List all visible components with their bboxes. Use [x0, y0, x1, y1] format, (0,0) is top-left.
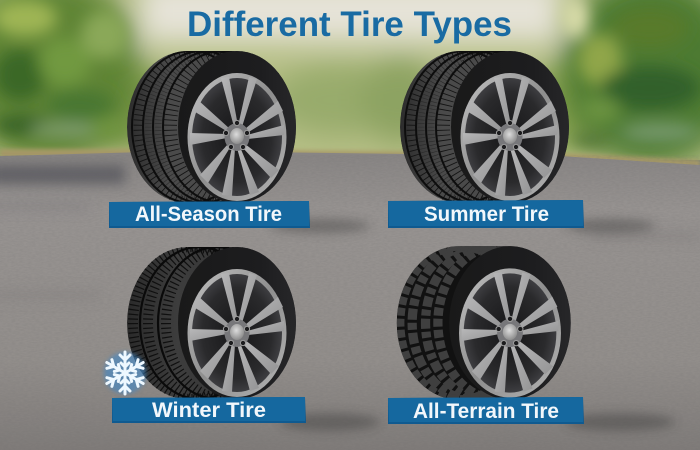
tire: all-season — [127, 51, 296, 203]
label bar: winter: Winter Tire — [152, 398, 266, 422]
label bar: all-terrain: All-Terrain Tire — [413, 399, 559, 423]
panel: all-season tire — [109, 51, 310, 228]
panel: summer tire — [388, 51, 584, 228]
icon: snowflake — [104, 352, 146, 394]
tire: all-terrain — [397, 246, 571, 400]
tire shadows — [270, 219, 675, 431]
label bar: summer — [388, 200, 584, 228]
label bar: all-season — [109, 201, 310, 228]
panel: all-terrain tire — [388, 246, 584, 424]
label bar: winter — [112, 397, 306, 423]
tire: summer — [400, 51, 569, 203]
tire: winter — [127, 247, 296, 399]
label bar: summer: Summer Tire — [424, 202, 549, 226]
background: blurred forest — [0, 0, 700, 168]
label bar: all-terrain — [388, 397, 584, 424]
title: Different Tire Types — [187, 5, 512, 44]
roadside verge — [0, 149, 700, 168]
label bar: all-season: All-Season Tire — [135, 202, 282, 226]
panel: winter tire — [104, 247, 306, 423]
background: asphalt road — [0, 151, 700, 450]
